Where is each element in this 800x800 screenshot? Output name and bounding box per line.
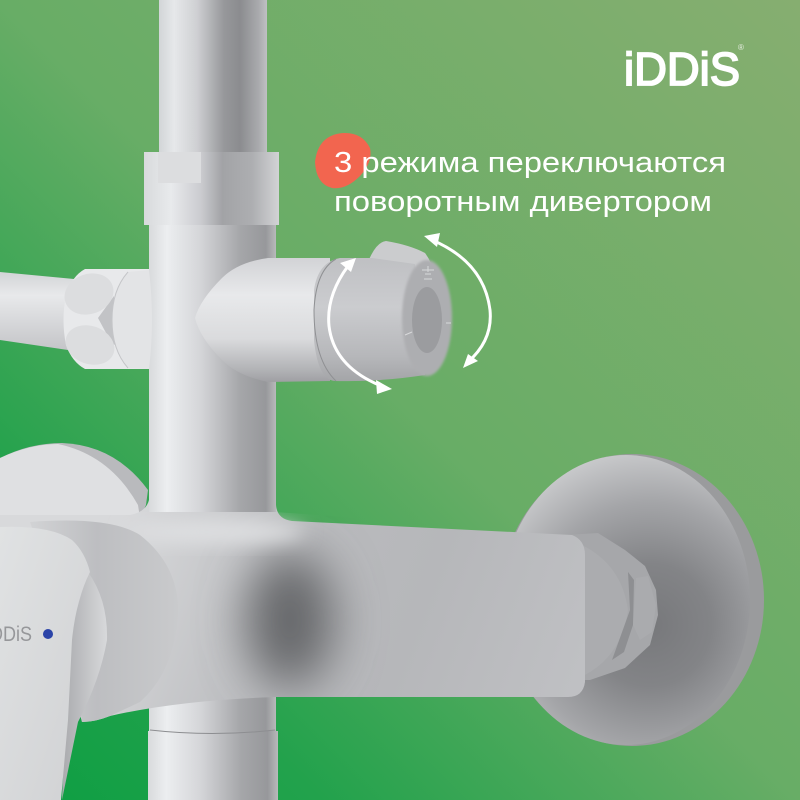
rotary diverter knob — [314, 241, 452, 381]
top pipe — [159, 0, 267, 153]
collar — [144, 152, 279, 225]
knob inner button — [412, 287, 442, 353]
main vertical pipe — [149, 224, 276, 534]
side connector arm — [0, 272, 74, 350]
knob tab — [368, 241, 434, 275]
hex nut: right — [565, 533, 658, 680]
diverter body — [195, 258, 330, 382]
handle blue dot — [43, 629, 53, 639]
red blob — [315, 133, 371, 188]
arrow: right rotation — [424, 233, 490, 368]
knob face — [402, 260, 452, 376]
heading — [334, 147, 726, 218]
knob groove — [314, 259, 336, 381]
heading: 3 режима переключаются — [334, 147, 726, 179]
wall plate: right — [500, 454, 764, 746]
lower pipe — [148, 690, 278, 800]
mixer arm — [0, 500, 585, 722]
side connector nut — [59, 267, 152, 371]
brand logo: ® — [738, 43, 744, 52]
brand logo: iDDiS — [624, 43, 740, 95]
arrow: left rotation — [329, 258, 392, 394]
mixer ring — [30, 521, 178, 722]
arm shadow — [125, 520, 334, 688]
mixer handle — [0, 527, 90, 800]
knob cylinder — [314, 258, 425, 381]
wall plate: left — [0, 443, 148, 518]
knob mode marks — [405, 266, 451, 335]
mixer handle crescent — [62, 572, 107, 800]
heading: поворотным дивертором — [334, 186, 712, 218]
